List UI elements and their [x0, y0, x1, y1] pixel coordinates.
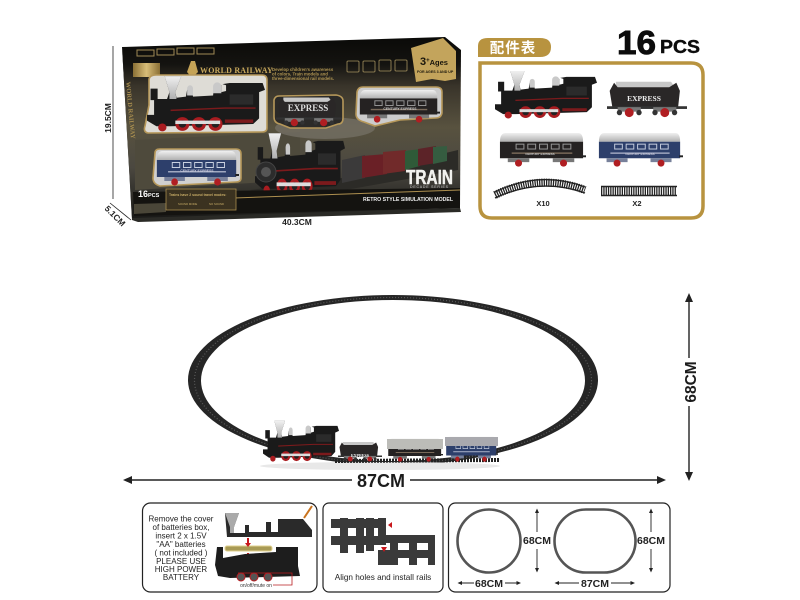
large locomotive [255, 133, 345, 194]
age flap: FOR AGES 3 AND UP [417, 70, 454, 74]
box description: of colors, Train models and [272, 72, 328, 76]
open locomotive illustration: on/off/mute on [240, 583, 272, 589]
brand logo [187, 61, 273, 78]
part: black carriage [500, 133, 586, 167]
box side and bottom faces [122, 47, 461, 222]
part: tender: EXPRESS [627, 94, 661, 103]
oval height: 68CM [637, 535, 665, 547]
parts list heading tag [478, 38, 551, 57]
blue carriage window [153, 149, 241, 186]
oval height [637, 508, 665, 572]
open locomotive illustration [215, 506, 312, 589]
red arrows [381, 522, 392, 552]
instruction text: Remove the cover [149, 514, 214, 524]
instruction text: "AA" batteries [156, 540, 206, 549]
box description [272, 67, 334, 81]
round width: 68CM [475, 578, 503, 590]
age flap: Ages [430, 58, 448, 67]
box dimension: height: 19.5CM [103, 103, 113, 133]
box front face [122, 37, 461, 218]
part: curved rail: X10 [536, 199, 550, 208]
blue carriage [445, 437, 498, 462]
part: blue carriage: CENTURY EXPRESS [625, 152, 655, 156]
round layout [458, 510, 520, 572]
instruction text: of batteries box, [153, 523, 209, 532]
oval track [188, 295, 598, 465]
tender and wagons [342, 146, 447, 183]
round width [458, 578, 521, 590]
age flap: + [426, 58, 430, 64]
train on the track [260, 421, 500, 470]
panel: rail assembly [323, 503, 443, 592]
parts count [617, 24, 700, 61]
rail bed [250, 150, 458, 197]
part: tender [607, 82, 687, 117]
box dimension: width: 40.3CM [282, 217, 312, 227]
tender window: EXPRESS [288, 103, 328, 113]
instruction text: ( not included ) [155, 548, 208, 558]
part: blue carriage [599, 133, 683, 167]
part: straight rail [601, 186, 677, 208]
box description: three-dimensional rail models. [272, 76, 334, 81]
locomotive [263, 421, 339, 462]
brand logo: WORLD RAILWAY [200, 66, 273, 75]
part: black carriage: CENTURY EXPRESS [525, 152, 555, 156]
instruction text: PLEASE USE [156, 557, 206, 566]
oval width [554, 578, 635, 590]
box description: Develop children's awareness [272, 67, 334, 72]
side title: WORLD RAILWAY [124, 82, 136, 139]
box dimension: depth: 5.1CM [103, 203, 128, 228]
bottom band [133, 188, 460, 216]
parts list heading tag: 配件表 [490, 39, 536, 57]
carriage window [356, 87, 442, 126]
dimension arrow: 87CM: 87CM [357, 471, 405, 491]
panel: parts list [480, 63, 703, 218]
rail illustration [331, 518, 435, 565]
TRAIN title: TRAIN [406, 167, 453, 189]
part: locomotive [495, 71, 597, 119]
bottom band: SOUND MODE [178, 202, 197, 206]
age flap: 3 [420, 56, 426, 68]
parts count: PCS [660, 37, 700, 57]
carriage window: CENTURY EXPRESS [383, 107, 417, 111]
bottom band: NO SOUND [209, 202, 224, 206]
building backdrop [135, 132, 300, 190]
locomotive window [144, 75, 267, 133]
gold tag [133, 63, 160, 77]
tender [338, 442, 382, 462]
part: curved rail [495, 180, 585, 208]
panel: track layouts [448, 503, 670, 592]
carriage [387, 439, 443, 462]
bottom band: RETRO STYLE SIMULATION MODEL [363, 197, 454, 203]
feature icons [347, 60, 407, 72]
oval layout [554, 510, 636, 572]
age flap [411, 38, 456, 82]
blue carriage window: CENTURY EXPRESS [180, 169, 214, 173]
instruction text: HIGH POWER [155, 565, 207, 574]
round height: 68CM [523, 535, 551, 547]
product box [122, 37, 461, 222]
instruction text: insert 2 x 1.5V [155, 532, 207, 540]
tender window [274, 95, 343, 128]
dimension arrow: 87CM [123, 471, 666, 491]
round height [523, 508, 551, 572]
dimension arrow: 68CM [683, 293, 700, 481]
instruction text [149, 514, 214, 582]
instruction text: BATTERY [163, 573, 200, 582]
bottom band: Trains have 2 sound travel modes: [169, 193, 226, 197]
bottom band: 16PCS [138, 189, 160, 199]
dimension arrow: 68CM: 68CM [683, 361, 700, 403]
caption: Align holes and install rails [335, 573, 431, 582]
top feature icons [137, 48, 214, 56]
parts count: 16 [617, 24, 656, 61]
oval width: 87CM [581, 578, 609, 590]
tender: EXPRESS [351, 453, 370, 458]
panel: battery instructions [142, 503, 317, 592]
smoke [275, 117, 375, 139]
TRAIN title: DECADE SERIES [410, 185, 449, 189]
part: straight rail: X2 [632, 199, 642, 208]
